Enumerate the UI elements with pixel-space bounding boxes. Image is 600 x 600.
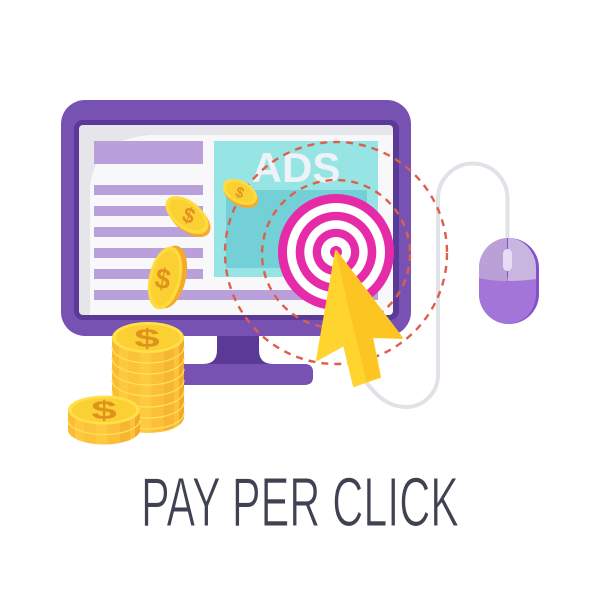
monitor stand — [170, 334, 313, 385]
falling coin large: $ — [153, 262, 174, 296]
monitor frame — [61, 100, 411, 336]
mouse cable — [366, 164, 508, 407]
small coin stack — [68, 396, 140, 444]
dollar sign: $ — [91, 396, 117, 425]
ads label: ADS — [252, 144, 340, 191]
dollar sign: $ — [134, 324, 160, 353]
monitor inner bezel — [74, 120, 399, 320]
computer mouse — [479, 238, 539, 324]
coin face — [112, 322, 184, 353]
ads panel — [214, 141, 378, 277]
falling coin medium: $ — [179, 203, 198, 229]
mouse right button — [508, 238, 536, 281]
mouse lower body — [479, 277, 536, 324]
falling coin small — [219, 174, 262, 213]
coin face — [68, 396, 140, 424]
page text lines — [94, 141, 378, 300]
ads inner panel — [226, 190, 367, 268]
arrow cursor — [317, 251, 402, 386]
monitor — [61, 100, 411, 385]
scroll wheel — [503, 249, 512, 271]
mouse body edge — [479, 238, 539, 324]
screen — [79, 125, 393, 315]
falling coin large — [142, 242, 193, 313]
falling coin small: $ — [233, 184, 246, 202]
falling coin medium — [159, 189, 217, 244]
screen light area — [90, 135, 393, 315]
dashed click ripples — [225, 142, 447, 364]
monitor stand base — [170, 364, 313, 385]
mouse left button — [479, 238, 507, 281]
tall coin stack — [112, 322, 184, 433]
target — [278, 194, 394, 310]
